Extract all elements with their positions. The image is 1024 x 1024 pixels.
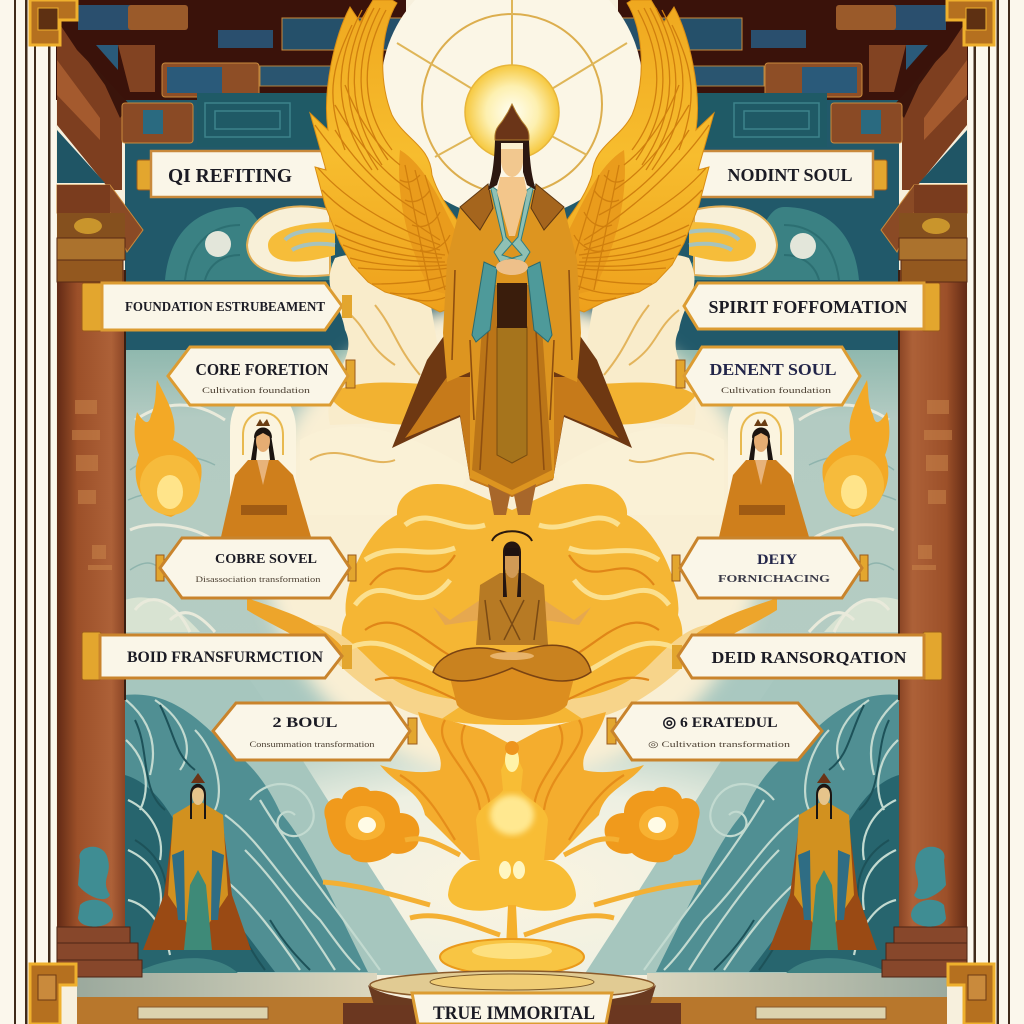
label: deity forging: DEIY [757,552,797,568]
title plaque: true immortal: TRUE IMMORITAL [433,1004,595,1024]
label: core formation: CORE FORETION [196,360,329,379]
ornamental frame left [0,0,77,1024]
label: soul: 2 BOUL [272,715,338,731]
standing figure right [769,773,877,950]
stone pedestal [343,971,681,1024]
temple roof beams right [618,0,968,190]
lower flame column [380,712,644,860]
left golden wing [310,0,475,312]
label: deity soul: Cultivation foundation [721,385,832,395]
label: core novel: Disassociation transformation [196,574,321,584]
clasped hands [496,259,528,275]
halo disc with rings [381,0,643,219]
stone floor right [647,973,947,1024]
left column [57,185,143,977]
belt panel [497,327,527,463]
right golden wing [549,0,714,312]
robe [443,190,581,495]
lower teal clouds left [125,680,440,975]
lower side flame right [605,787,700,862]
label: foundation establishment: FOUNDATION ESTRUBEAMENT [125,299,325,314]
label: qi refining: QI REFITING [168,165,292,187]
label: deity forging [672,538,868,598]
small figure right [719,389,809,537]
label: foundation establishment [82,283,352,331]
label: body transformation: BOID FRANSFURMCTION [127,649,323,666]
label: spirit formation [684,283,940,331]
torso [476,573,548,645]
lower side flame left [324,787,419,862]
chest skin [497,177,527,236]
label: spirit formation: SPIRIT FOFFOMATION [708,297,908,317]
teal cuffs [472,262,552,342]
lower drapes [448,662,576,720]
feet [488,484,536,515]
label: core formation: Cultivation foundation [202,385,311,395]
flame wisps [323,839,701,935]
side flame left [135,380,202,517]
label: deity soul [676,347,860,405]
collar and sash [490,185,534,262]
crossed legs [433,645,591,681]
head and hair [503,542,521,597]
stone floor left [77,973,377,1024]
temple roof beams left [56,0,406,190]
crown [495,104,529,140]
label: soul [213,703,417,760]
golden disc [440,939,584,975]
pale mid clouds left [125,405,225,632]
ornamental frame right [947,0,1024,1024]
ornate shoulders [460,184,564,230]
central immortal figure [392,104,632,515]
cream and gold plume left [247,206,335,276]
orange outer drapes [405,377,619,497]
label: deity transformation [672,632,942,680]
meditating figure [433,531,591,720]
label: nodint soul [698,151,887,197]
label: core novel: COBRE SOVEL [215,552,317,567]
label: core novel [156,538,356,598]
label: eratedul [607,703,822,760]
small figure left [221,389,311,537]
glowing lower figure [448,741,576,948]
cream clouds around the robe [300,255,724,515]
hair [488,140,536,190]
golden cloud mass [247,484,777,725]
label: eratedul: ◎ Cultivation transformation [648,739,791,749]
cloak [392,320,632,497]
label: deity soul: DENENT SOUL [710,360,836,379]
right column [881,185,967,977]
label: deity transformation: DEID RANSORQATION [712,648,907,667]
label: eratedul: ◎ 6 ERATEDUL [662,715,778,731]
standing figure left [143,773,251,950]
face [501,143,523,177]
label: body transformation [82,632,352,680]
label: deity forging: FORNICHACING [718,573,831,585]
inner dark robe [472,285,552,490]
title plaque: true immortal [412,993,612,1024]
teal wave medallions [165,207,859,280]
label: soul: Consummation transformation [250,739,375,749]
side flame right [822,380,889,517]
label: nodint soul: NODINT SOUL [728,165,852,185]
cream and gold plume right [689,206,777,276]
pale mid clouds right [799,405,899,632]
label: core formation [168,347,355,405]
arms [433,600,591,625]
label: qi refining [137,151,326,197]
lower teal clouds right [584,680,899,975]
